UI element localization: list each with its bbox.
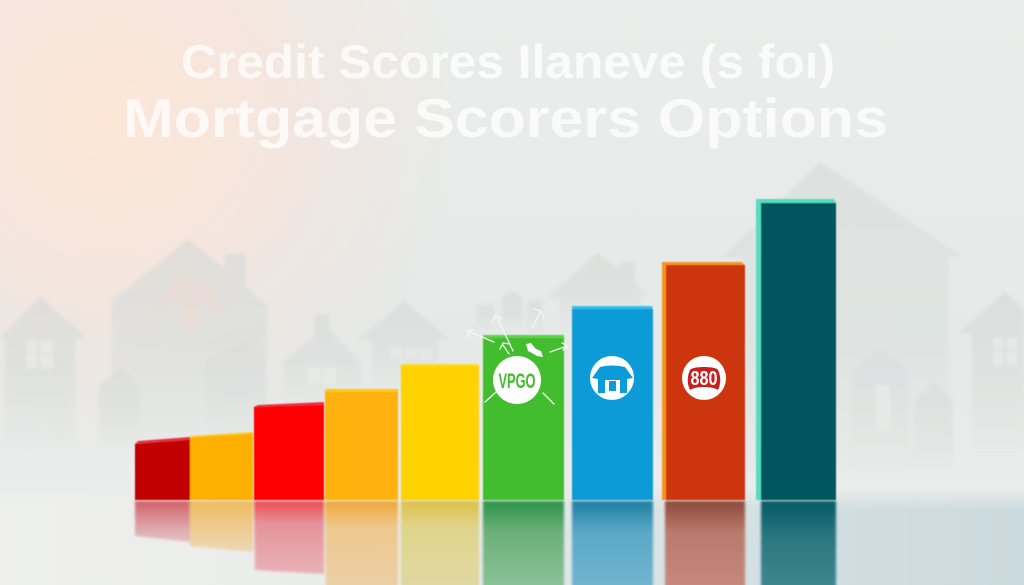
bar 2: amber: [190, 432, 253, 500]
bar 9: dark teal: [756, 199, 836, 500]
icon: red score badge: 880: [690, 368, 718, 390]
house: far left: [0, 297, 87, 445]
bar 4: orange: [325, 389, 398, 500]
house: big right: [722, 162, 963, 470]
faded house silhouettes: [0, 162, 1024, 470]
house: far right: [958, 292, 1024, 450]
house: small lower right: [845, 347, 915, 470]
icon: red score badge: [682, 356, 726, 400]
bar 5: yellow: [401, 364, 479, 500]
bar 3: red: [254, 402, 324, 500]
house: small low left: [99, 368, 140, 445]
small shield glyph: [526, 343, 543, 357]
title line 1: Credit Scores Ilaneve (s foı): [181, 35, 835, 88]
house: tiny cluster behind green bar: [476, 291, 542, 335]
bar 8: red-orange: [662, 262, 745, 500]
house: middle: [358, 301, 450, 392]
icon: green score badge with rays: VPGO: [498, 370, 536, 393]
bar 7: blue: [572, 306, 653, 500]
title line 2: Mortgage Scorers Options: [123, 87, 888, 149]
house: small beside large: [206, 340, 265, 440]
bar chart: ascending credit score bars: [135, 199, 836, 500]
bar 6: green: [483, 335, 564, 500]
title: [123, 35, 888, 149]
house: small right: [915, 382, 953, 470]
arrows radiating from badge: [467, 309, 568, 404]
reflective floor: [565, 494, 1024, 585]
house: centre: [547, 253, 650, 330]
icon: green score badge with rays: [467, 309, 568, 404]
icon: blue house badge: [590, 356, 634, 400]
house: large with flower emblem: [112, 240, 267, 440]
house: middle left with chimney: [283, 315, 361, 405]
bar 1: dark red: [135, 437, 190, 500]
bar reflections: [135, 501, 836, 585]
